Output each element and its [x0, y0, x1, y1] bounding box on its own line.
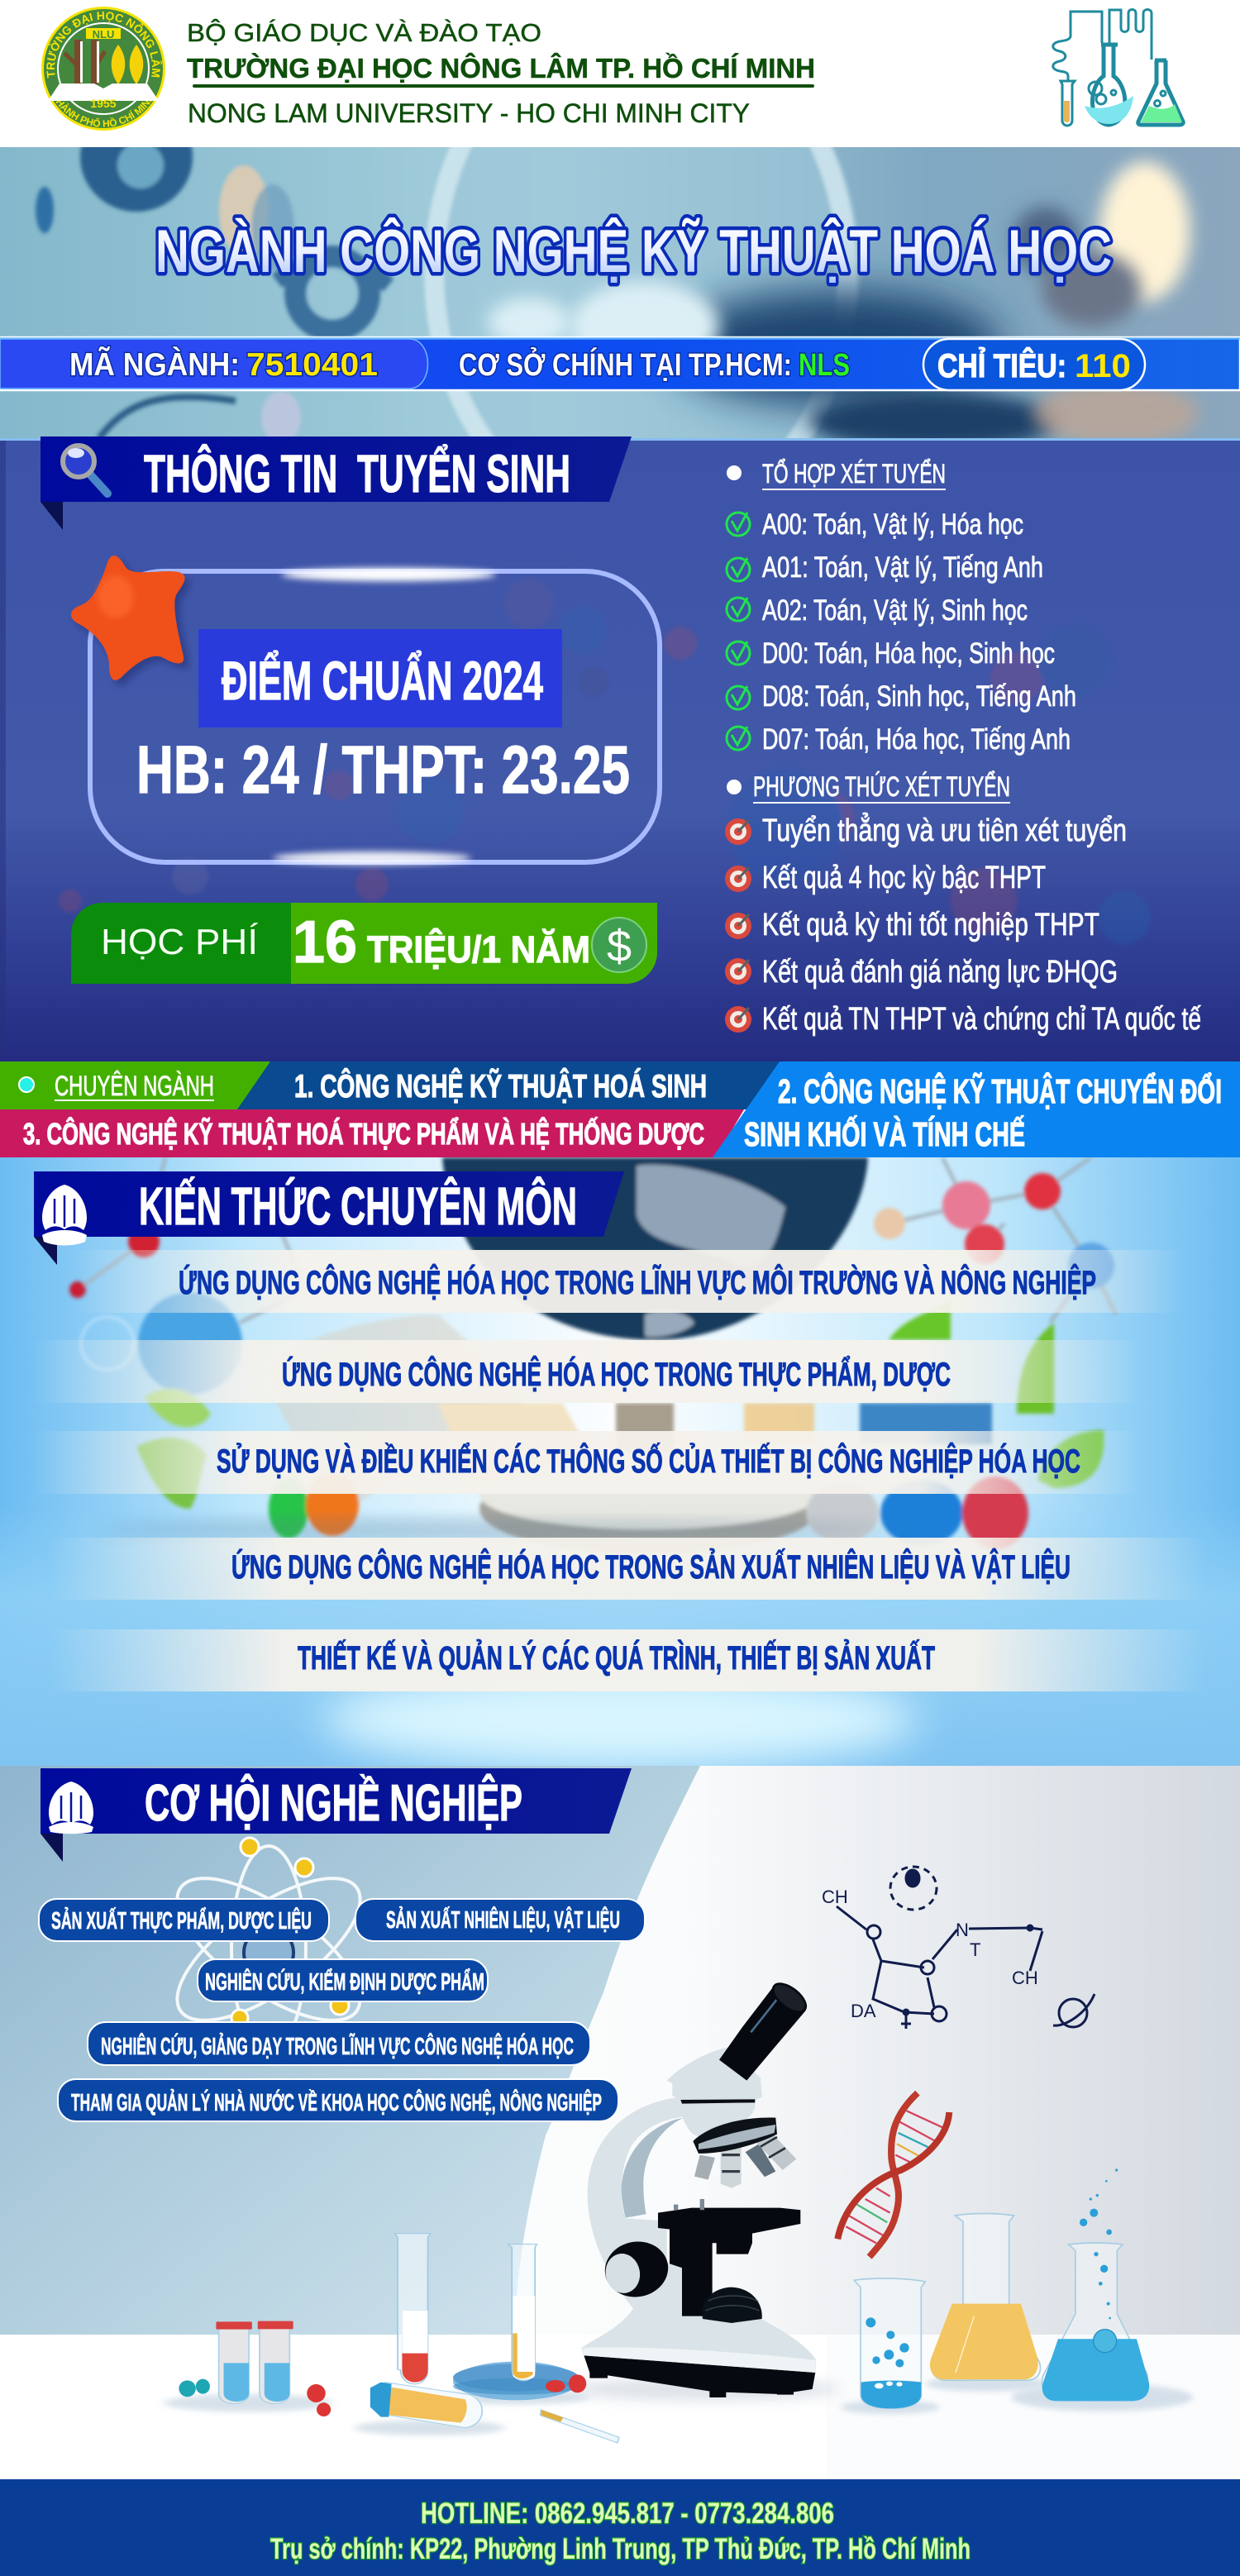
university name: BỘ GIÁO DỤC VÀ ĐÀO TẠO	[187, 18, 541, 47]
major code: 7510401	[246, 347, 378, 383]
career pill 4	[88, 2022, 590, 2065]
illustration: DNA helix	[837, 2093, 949, 2257]
icon: magnifier	[63, 446, 107, 494]
career pill 4: NGHIÊN CỨU, GIẢNG DẠY TRONG LĨNH VỰC CÔNG NGHỆ HÓA HỌC	[101, 2032, 574, 2060]
career pill 2	[355, 1899, 645, 1941]
banner background	[0, 147, 1240, 438]
background illustration: globe and lab glassware	[69, 1157, 1116, 1554]
illustration: microscope	[565, 1978, 841, 2400]
icon: book emblem	[42, 1185, 87, 1245]
section heading: careers: CƠ HỘI NGHỀ NGHIỆP	[145, 1775, 522, 1832]
benchmark label	[198, 629, 562, 727]
university name: TRƯỜNG ĐẠI HỌC NÔNG LÂM TP. HỒ CHÍ MINH	[187, 52, 815, 83]
specializations label	[19, 1071, 214, 1102]
benchmark label: ĐIỂM CHUẨN 2024	[222, 650, 543, 711]
logo: THÀNH PHỐ HỒ CHÍ MINH	[56, 101, 152, 127]
admission methods list: Kết quả 4 học kỳ bậc THPT	[762, 861, 1046, 895]
tuition bar: 16	[293, 909, 357, 976]
icon: molecule formula: T	[970, 1939, 980, 1960]
logo: 1955	[90, 97, 117, 110]
specialization 2	[744, 1071, 1222, 1153]
footer	[0, 2479, 1240, 2576]
address: Trụ sở chính: KP22, Phường Linh Trung, TP Thủ Đức, TP. Hồ Chí Minh	[270, 2533, 971, 2565]
admission methods list	[725, 771, 1201, 1037]
illustration: beakers and flasks	[841, 2168, 1193, 2414]
icon: molecule formula: CH	[822, 1887, 848, 1907]
career pill 3	[198, 1959, 488, 2001]
admission combinations list: D00: Toán, Hóa học, Sinh học	[762, 637, 1055, 670]
knowledge row 2	[33, 1340, 1141, 1403]
section heading: admissions info	[41, 436, 632, 530]
icon: planet	[1053, 1994, 1095, 2027]
section heading: specialist knowledge	[34, 1171, 624, 1265]
career pill 2: SẢN XUẤT NHIÊN LIỆU, VẬT LIỆU	[386, 1906, 620, 1934]
admission combinations list: A00: Toán, Vật lý, Hóa học	[762, 508, 1023, 541]
hotline: HOTLINE: 0862.945.817 - 0773.284.806	[421, 2497, 834, 2530]
icon: dollar coin	[592, 918, 646, 972]
logo: NLU	[93, 28, 114, 41]
knowledge row 3	[33, 1431, 1141, 1494]
logo: TRƯỜNG ĐẠI HỌC NÔNG LÂM	[46, 12, 162, 78]
icon: molecule formula: CH	[1012, 1968, 1038, 1988]
icon: molecule formula: N	[956, 1920, 969, 1940]
university name: NONG LAM UNIVERSITY - HO CHI MINH CITY	[188, 98, 750, 128]
campus: CƠ SỞ CHÍNH TẠI TP.HCM:	[459, 346, 792, 383]
career pill 5: THAM GIA QUẢN LÝ NHÀ NƯỚC VỀ KHOA HỌC CÔNG NGHỆ, NÔNG NGHIỆP	[71, 2088, 602, 2116]
knowledge row 4	[50, 1538, 1207, 1600]
specializations label: CHUYÊN NGÀNH	[55, 1071, 214, 1102]
tuition bar: HỌC PHÍ	[101, 922, 259, 962]
benchmark score box	[71, 556, 660, 865]
quota pill: 110	[1075, 348, 1131, 384]
info stripe	[0, 337, 1240, 390]
admission combinations list: D07: Toán, Hóa học, Tiếng Anh	[762, 723, 1071, 756]
university name	[187, 18, 815, 128]
illustration: tubes on the table	[164, 2234, 619, 2443]
career pill 3: NGHIÊN CỨU, KIỂM ĐỊNH DƯỢC PHẨM	[205, 1968, 484, 1996]
admission methods list: PHƯƠNG THỨC XÉT TUYỂN	[753, 771, 1010, 803]
logo	[41, 7, 165, 131]
career pill 5	[58, 2079, 618, 2121]
section heading: specialist knowledge: KIẾN THỨC CHUYÊN MÔN	[139, 1176, 577, 1236]
panel: specialist knowledge	[0, 1157, 1240, 1769]
admission combinations list: D08: Toán, Sinh học, Tiếng Anh	[762, 680, 1076, 713]
icon: dollar coin: $	[607, 922, 632, 971]
icon: orange star	[71, 556, 190, 685]
specializations band	[0, 1061, 1240, 1157]
background atom	[156, 1838, 381, 2053]
admission combinations list: A01: Toán, Vật lý, Tiếng Anh	[762, 551, 1043, 584]
career pill 1: SẢN XUẤT THỰC PHẨM, DƯỢC LIỆU	[51, 1906, 312, 1934]
admission methods list: Kết quả kỳ thi tốt nghiệp THPT	[762, 908, 1099, 942]
admission methods list: Tuyển thẳng và ưu tiên xét tuyển	[762, 812, 1127, 848]
knowledge row 5	[50, 1629, 1207, 1691]
icon: chemistry flasks	[1053, 10, 1183, 126]
specialization 2: SINH KHỐI VÀ TÍNH CHẾ	[744, 1115, 1025, 1153]
specialization 1: 1. CÔNG NGHỆ KỸ THUẬT HOÁ SINH	[294, 1067, 707, 1104]
header	[0, 7, 1240, 147]
knowledge row 1	[74, 1250, 1182, 1313]
quota pill: CHỈ TIÊU:	[937, 346, 1066, 384]
quota pill	[923, 339, 1145, 390]
tuition bar	[71, 903, 657, 984]
panel: admissions	[0, 436, 1240, 1062]
tuition bar: TRIỆU/1 NĂM	[367, 928, 590, 971]
major code	[69, 346, 378, 383]
icon: molecule formula: DA	[851, 2001, 876, 2021]
benchmark values: HB: 24 / THPT: 23.25	[136, 732, 630, 808]
admission combinations list: TỔ HỢP XÉT TUYỂN	[762, 459, 946, 489]
section heading: careers	[41, 1768, 632, 1862]
admission combinations list: A02: Toán, Vật lý, Sinh học	[762, 594, 1028, 627]
campus: NLS	[799, 348, 850, 383]
icon: book emblem	[49, 1782, 93, 1834]
career pill 1	[39, 1899, 329, 1941]
section heading: admissions info: THÔNG TIN TUYỂN SINH	[144, 443, 570, 503]
major code: MÃ NGÀNH:	[69, 346, 240, 383]
admission methods list: Kết quả đánh giá năng lực ĐHQG	[762, 955, 1118, 990]
admission combinations list	[727, 459, 1076, 756]
icon: molecule formula	[822, 1867, 1042, 2029]
panel: career opportunities	[0, 1766, 1240, 2480]
specialization 3: 3. CÔNG NGHỆ KỸ THUẬT HOÁ THỰC PHẨM VÀ HỆ THỐNG DƯỢC	[23, 1116, 704, 1151]
